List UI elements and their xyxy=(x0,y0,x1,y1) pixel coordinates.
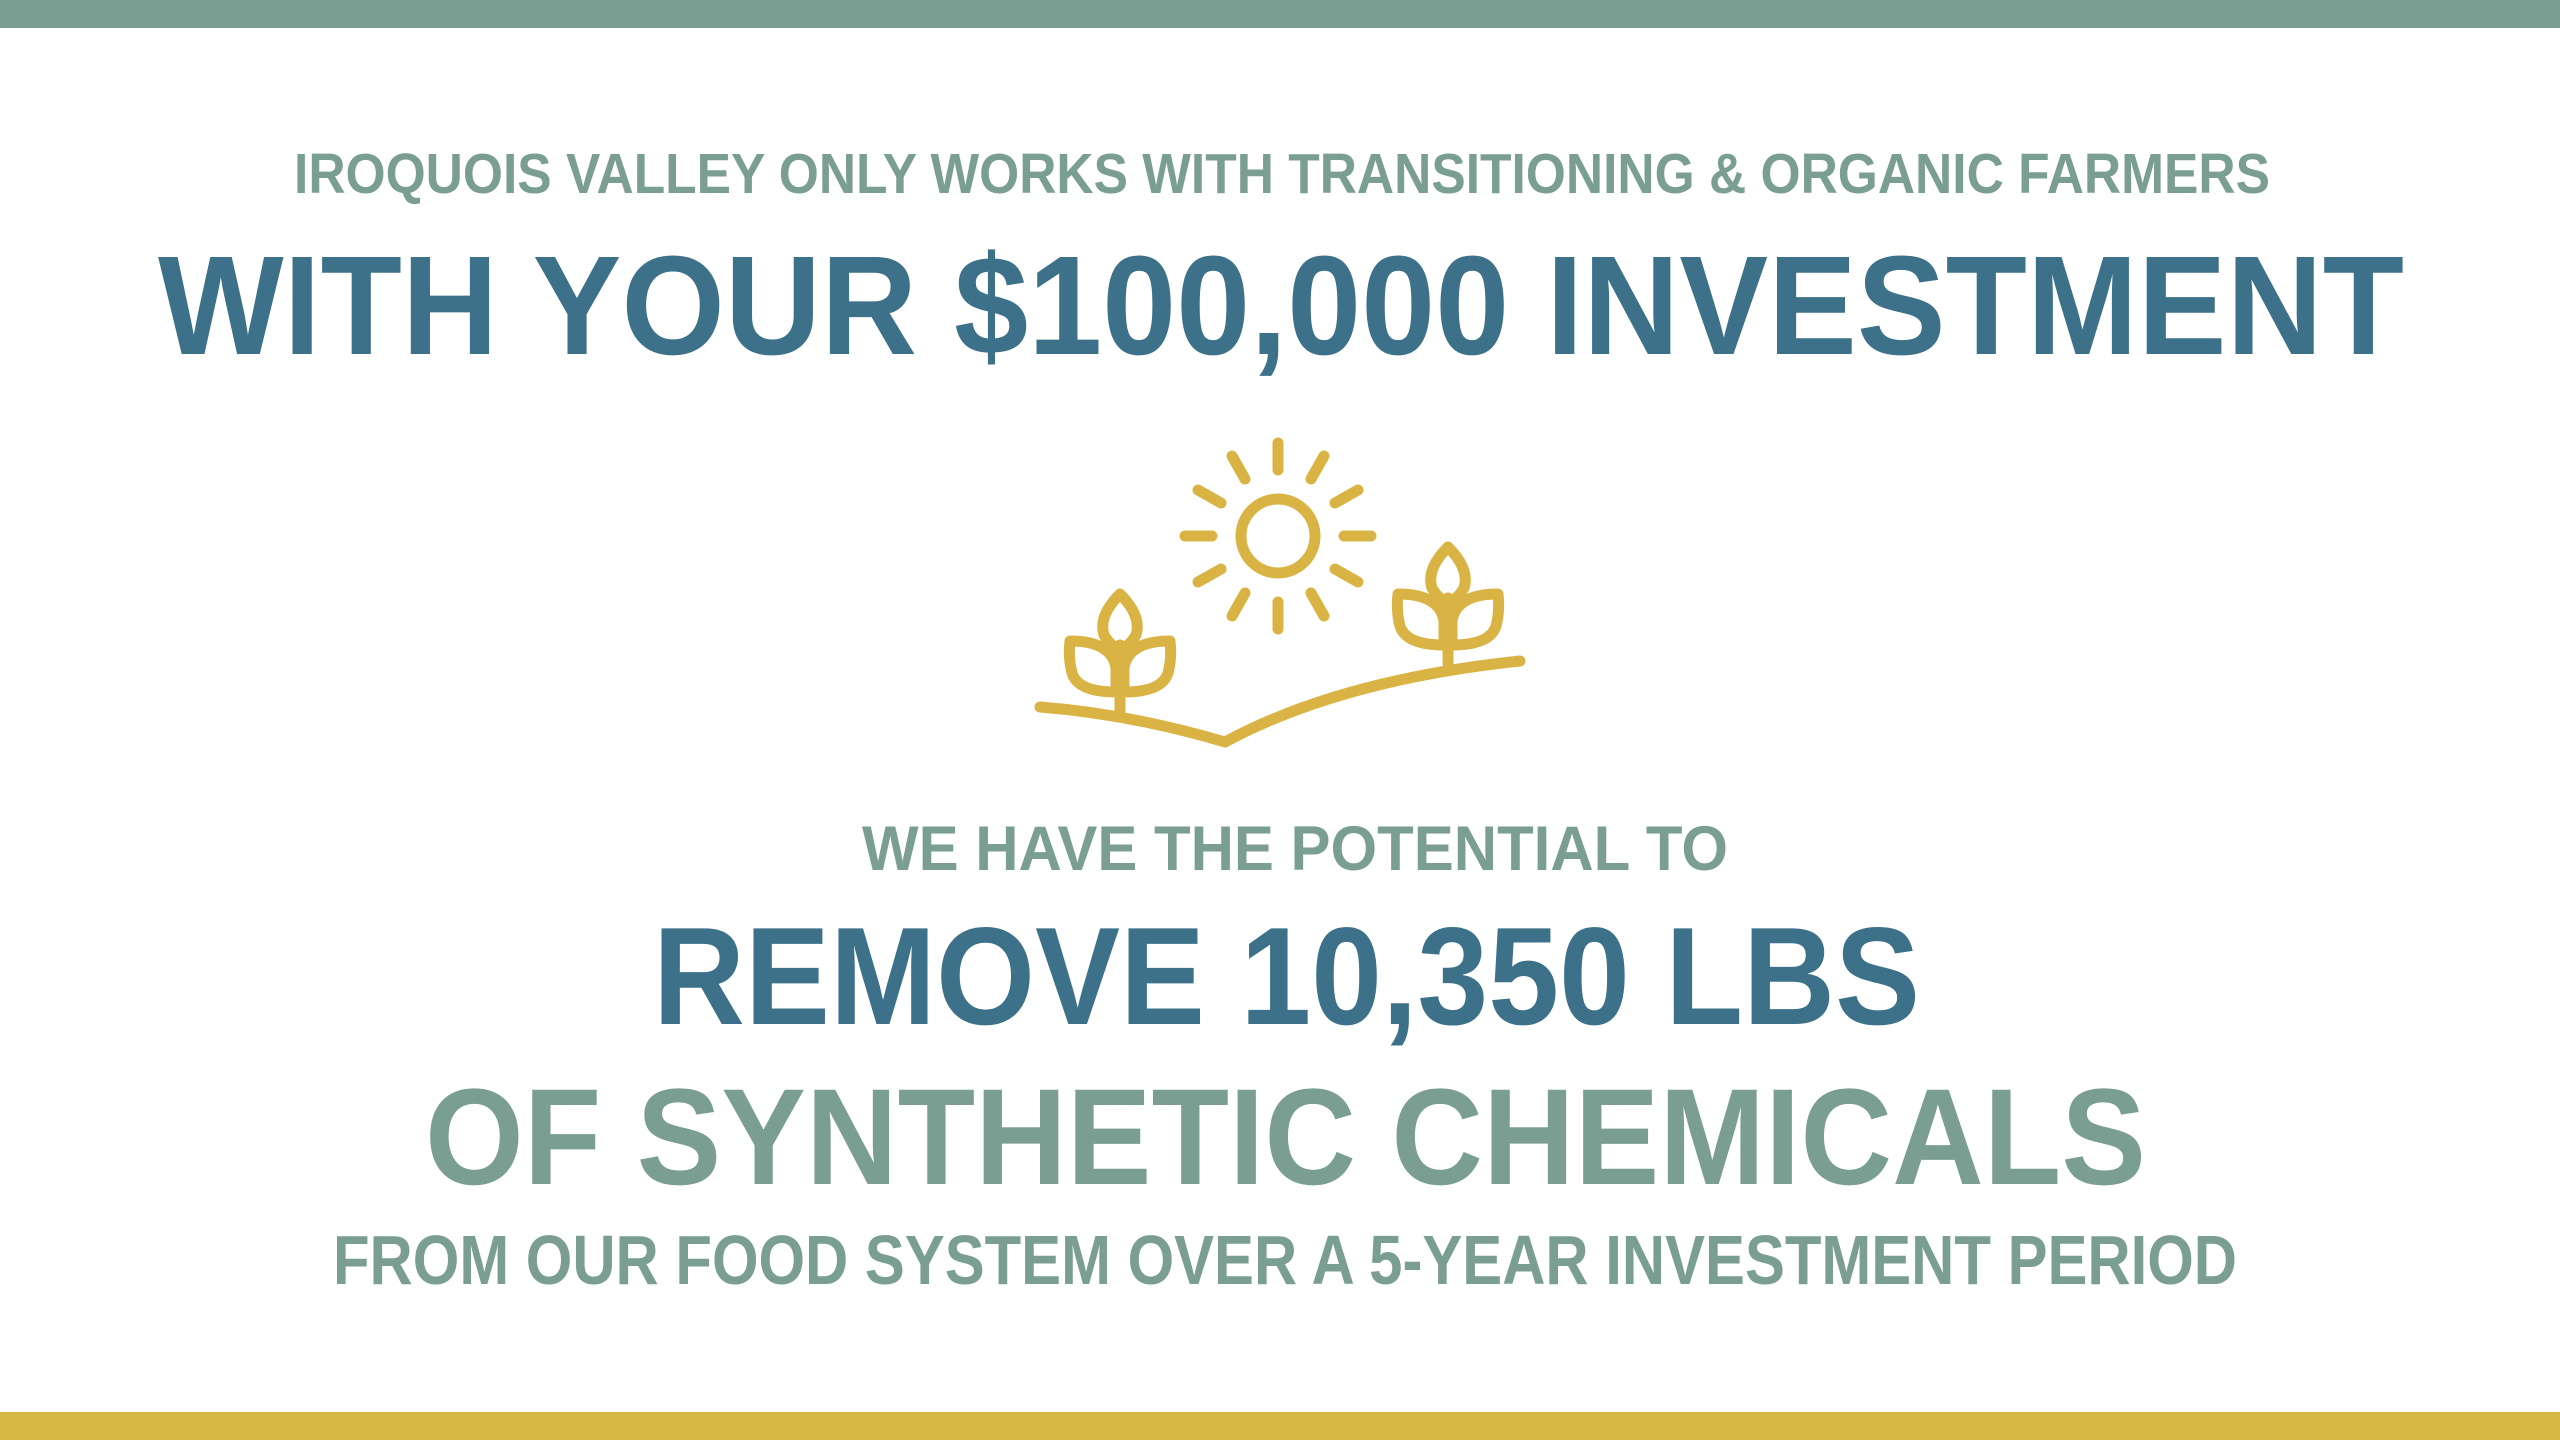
text: key figure: REMOVE 10,350 LBS xyxy=(653,899,1920,1054)
text: lead-in: WE HAVE THE POTENTIAL TO xyxy=(862,814,1728,884)
text: synthetic chemicals: OF SYNTHETIC CHEMICALS xyxy=(425,1061,2146,1214)
icon: ground xyxy=(1040,661,1520,742)
icon: sun and sprouts xyxy=(1040,443,1520,742)
top bar xyxy=(0,0,2560,28)
icon: right sprout xyxy=(1397,547,1499,664)
title: WITH YOUR $100,000 INVESTMENT xyxy=(158,226,2404,384)
icon: left sprout xyxy=(1069,594,1171,712)
icon: sun xyxy=(1185,443,1371,629)
text: footer line: FROM OUR FOOD SYSTEM OVER A 5-YEAR INVESTMENT PERIOD xyxy=(333,1221,2237,1299)
subtitle: IROQUOIS VALLEY ONLY WORKS WITH TRANSITIONING & ORGANIC FARMERS xyxy=(294,142,2270,206)
bottom bar xyxy=(0,1412,2560,1440)
